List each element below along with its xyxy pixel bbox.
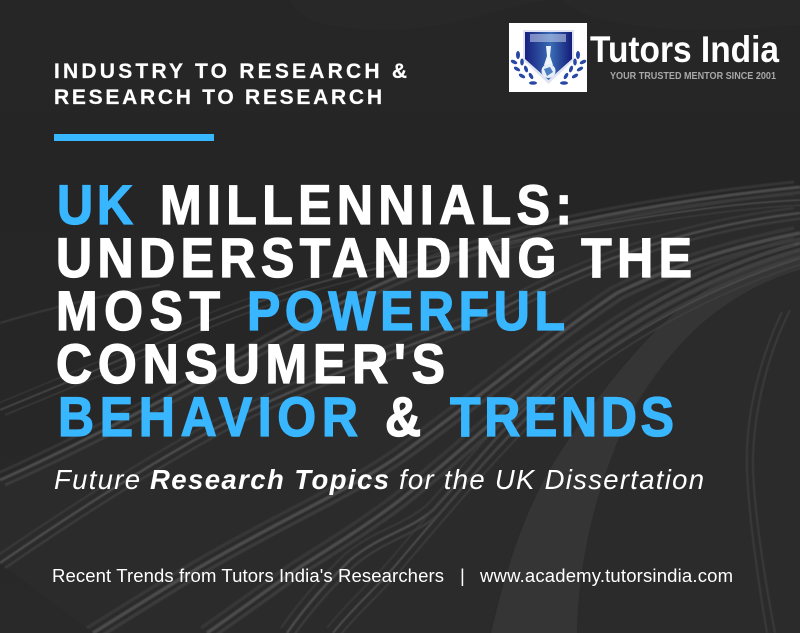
title: & (385, 386, 421, 449)
heading: industry to research: INDUSTRY TO RESEARCH & (54, 60, 407, 83)
heading: industry to research (54, 60, 407, 109)
logo: Tutors India (509, 23, 779, 92)
footer line (52, 565, 733, 586)
title: CONSUMER'S (56, 333, 445, 396)
hazy treeline (290, 0, 800, 30)
footer line: Recent Trends from Tutors India's Researchers (52, 565, 444, 586)
subtitle: for the UK Dissertation (399, 464, 704, 495)
title: MILLENNIALS: (160, 174, 572, 237)
subtitle: Research Topics (150, 464, 389, 495)
accent bar (54, 134, 214, 141)
footer line: | (460, 565, 465, 586)
subtitle: Future (54, 464, 140, 495)
wordmark: Tutors India (590, 29, 779, 70)
title: POWERFUL (247, 280, 565, 343)
title: TRENDS (450, 386, 674, 449)
title: UK (57, 174, 133, 237)
tagline: YOUR TRUSTED MENTOR SINCE 2001 (610, 70, 776, 82)
subtitle (54, 464, 704, 495)
title: MOST (56, 280, 220, 343)
footer line: www.academy.tutorsindia.com (479, 565, 733, 586)
title (56, 174, 692, 449)
heading: industry to research: RESEARCH TO RESEARCH (54, 86, 382, 109)
title: UNDERSTANDING THE (56, 227, 692, 290)
icon: logo badge (509, 23, 587, 92)
title: BEHAVIOR (58, 386, 358, 449)
